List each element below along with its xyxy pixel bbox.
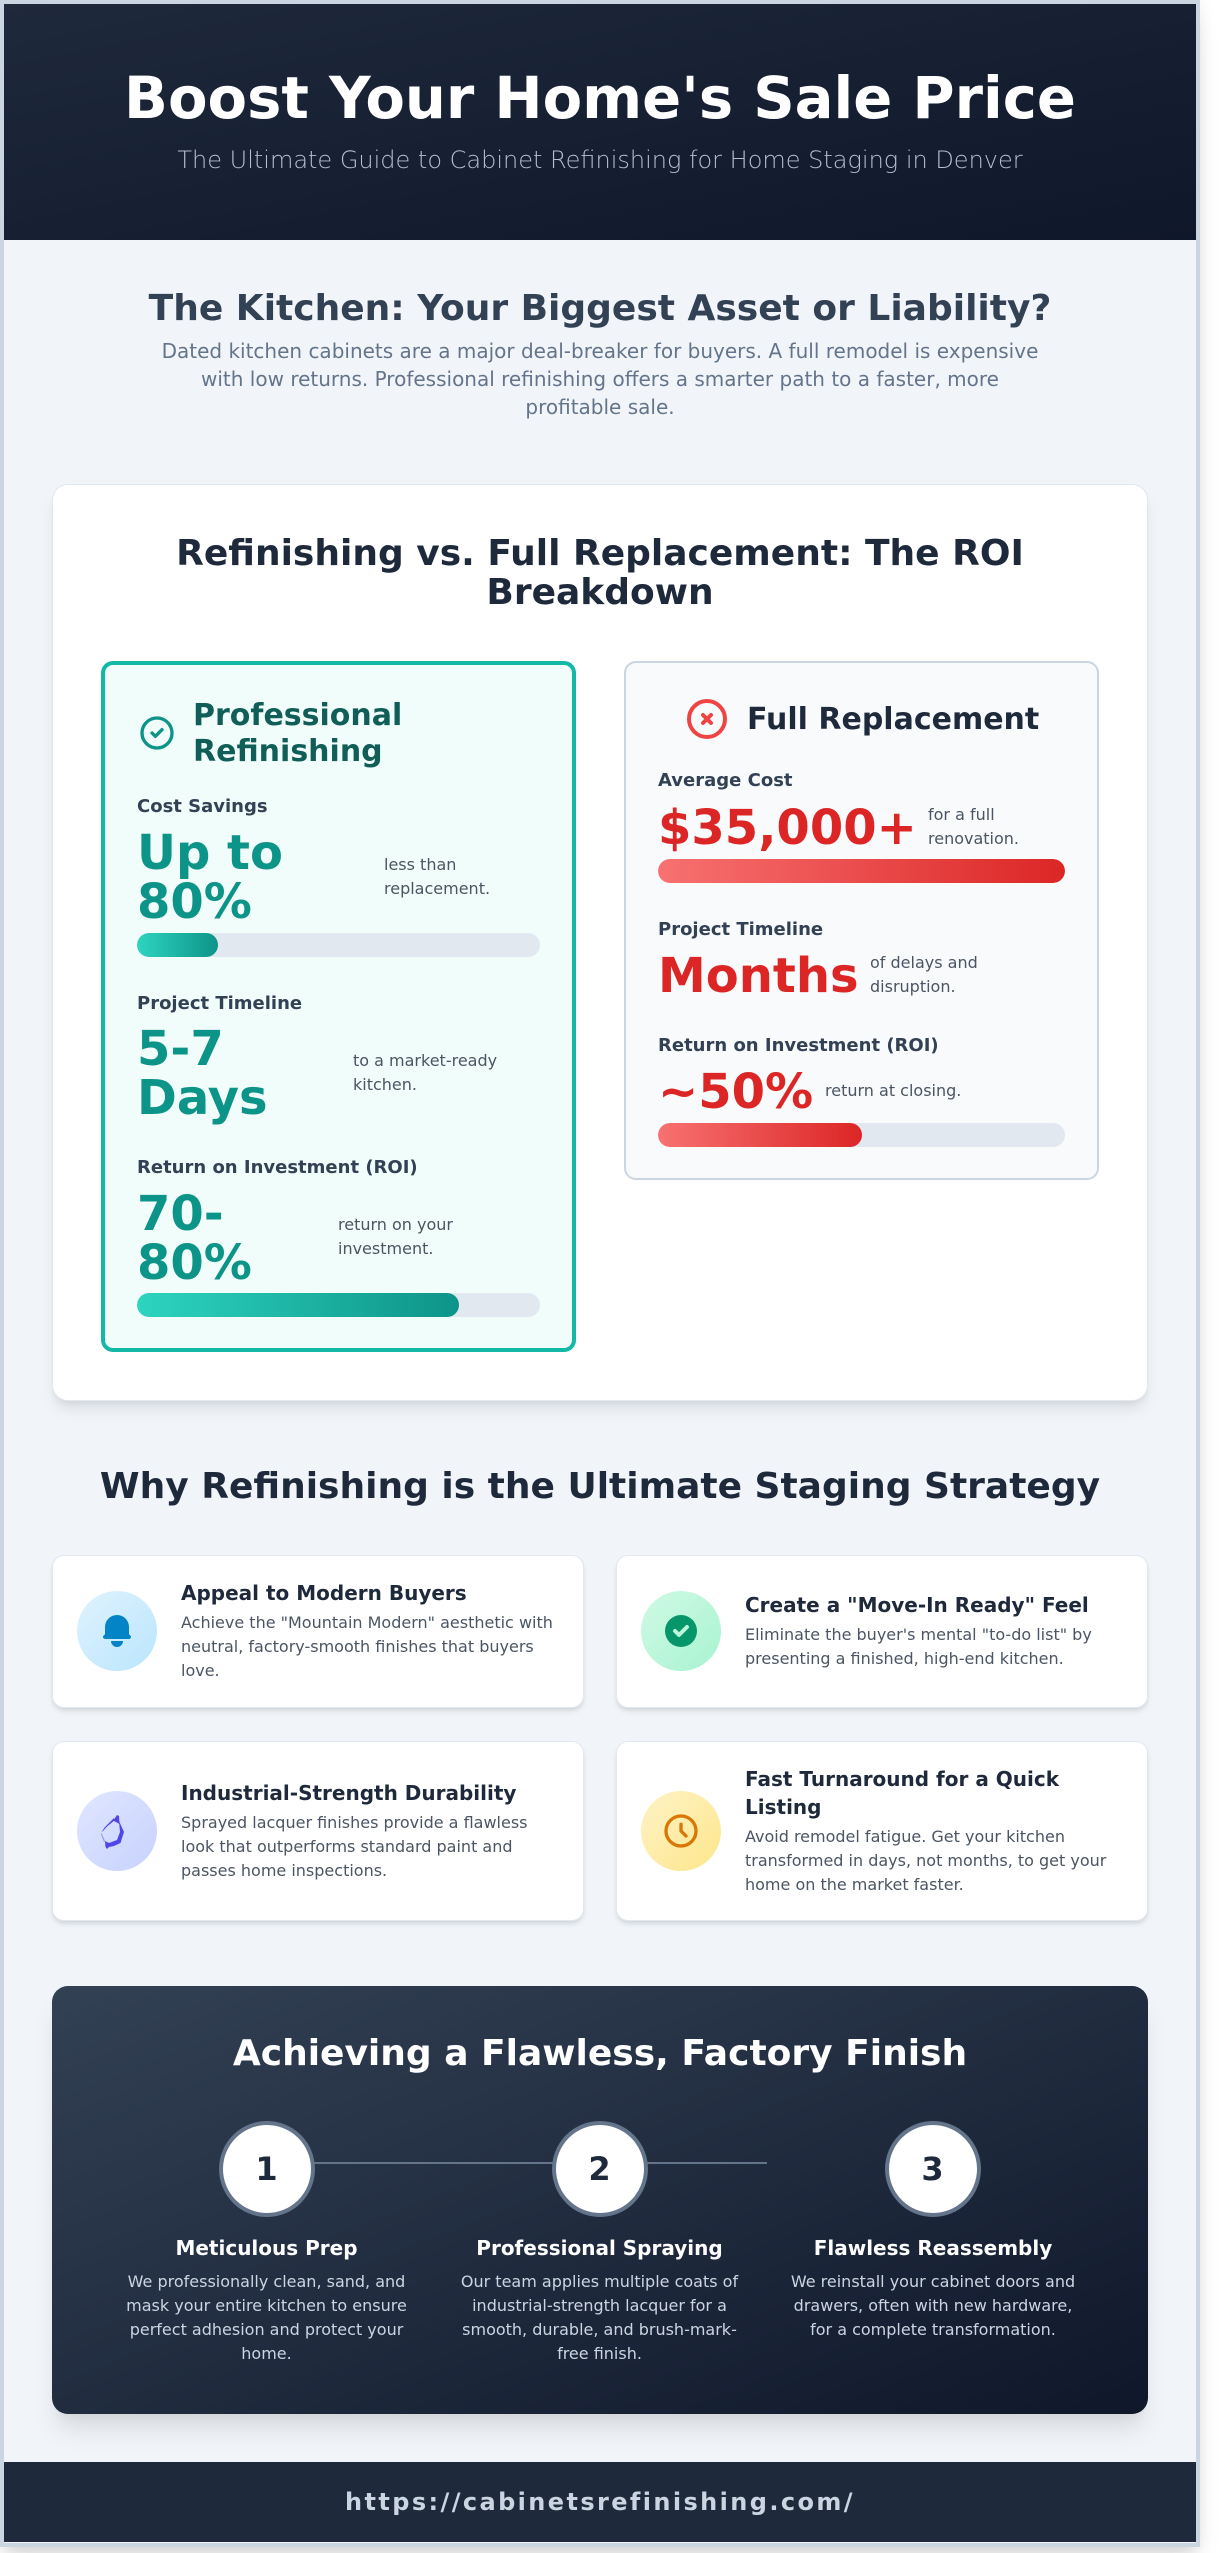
comparison heading — [176, 532, 1024, 613]
process heading: Achieving a Flawless, Factory Finish — [233, 2033, 967, 2074]
label: Average Cost — [658, 770, 793, 790]
metric: cost savings — [137, 796, 540, 957]
description — [870, 953, 978, 996]
step text — [461, 2272, 738, 2363]
panel heading — [193, 698, 402, 769]
step 1 — [126, 2121, 407, 2363]
value: $35,000+ — [658, 800, 917, 856]
description: to a market-ready — [353, 1051, 497, 1070]
description: return at closing. — [825, 1081, 961, 1100]
metric: project timeline — [658, 919, 978, 1004]
card text: look that outperforms standard paint and — [181, 1837, 513, 1856]
value: 80% — [137, 874, 252, 930]
description: investment. — [338, 1239, 433, 1258]
step text: mask your entire kitchen to ensure — [126, 2296, 407, 2315]
label: Project Timeline — [137, 993, 302, 1014]
intro paragraph: with low returns. Professional refinishing offers a smarter path to a faster, more — [201, 366, 999, 390]
icon: shield fragment — [77, 1791, 157, 1871]
card title: Listing — [745, 1795, 821, 1819]
card title: Industrial-Strength Durability — [181, 1781, 516, 1805]
metric: project timeline — [137, 993, 497, 1126]
description: replacement. — [384, 879, 490, 898]
header banner — [4, 4, 1196, 240]
description — [384, 855, 490, 898]
comparison heading: Refinishing vs. Full Replacement: The ROI — [176, 532, 1024, 574]
step number: 3 — [921, 2150, 944, 2188]
description: return on your — [338, 1215, 453, 1234]
step text: We professionally clean, sand, and — [128, 2272, 405, 2291]
card text: Eliminate the buyer's mental "to-do list" by — [745, 1625, 1092, 1644]
description: kitchen. — [353, 1075, 417, 1094]
card text — [745, 1625, 1092, 1668]
label: Return on Investment (ROI) — [137, 1157, 418, 1178]
card text: transformed in days, not months, to get your — [745, 1851, 1106, 1870]
card text: home on the market faster. — [745, 1875, 964, 1894]
metric: average cost — [658, 770, 1065, 883]
card text: passes home inspections. — [181, 1861, 387, 1880]
value — [137, 1021, 268, 1126]
strategy heading: Why Refinishing is the Ultimate Staging Strategy — [100, 1466, 1100, 1506]
card text: Avoid remodel fatigue. Get your kitchen — [745, 1827, 1065, 1846]
step text — [126, 2272, 407, 2363]
value — [137, 1186, 252, 1291]
step number — [218, 2121, 314, 2217]
card title: Fast Turnaround for a Quick — [745, 1767, 1059, 1791]
step title: Meticulous Prep — [175, 2236, 358, 2260]
progress bar 20% — [137, 933, 540, 957]
step number: 1 — [255, 2150, 278, 2188]
intro paragraph: Dated kitchen cabinets are a major deal-breaker for buyers. A full remodel is expensive — [162, 338, 1038, 362]
card text: love. — [181, 1661, 220, 1680]
panel: process steps — [52, 1986, 1148, 2414]
progress bar 80% — [137, 1293, 540, 1317]
step text: perfect adhesion and protect your — [130, 2320, 403, 2339]
card text: Sprayed lacquer finishes provide a flawless — [181, 1813, 528, 1832]
connector line — [266, 2162, 767, 2164]
step number — [884, 2121, 980, 2217]
description: renovation. — [928, 828, 1019, 848]
value: ~50% — [658, 1064, 813, 1120]
description — [928, 804, 1019, 848]
step text: Our team applies multiple coats of — [461, 2272, 738, 2291]
step 3 — [791, 2121, 1075, 2339]
comparison heading: Breakdown — [486, 572, 714, 613]
panel: full replacement — [624, 661, 1099, 1180]
value — [137, 825, 283, 930]
title: Boost Your Home's Sale Price — [124, 65, 1076, 132]
card title: Appeal to Modern Buyers — [181, 1581, 467, 1605]
intro paragraph: profitable sale. — [525, 394, 675, 418]
intro heading: The Kitchen: Your Biggest Asset or Liability? — [149, 288, 1051, 328]
panel: ROI comparison card — [52, 484, 1148, 1401]
label: Project Timeline — [658, 919, 823, 940]
icon: x circle outline — [687, 699, 727, 739]
feature card: fast turnaround — [616, 1741, 1148, 1921]
icon: clock — [641, 1791, 721, 1871]
description: disruption. — [870, 977, 956, 996]
subtitle: The Ultimate Guide to Cabinet Refinishing for Home Staging in Denver — [177, 146, 1023, 174]
description: of delays and — [870, 953, 978, 972]
website url: https://cabinetsrefinishing.com/ — [345, 2488, 855, 2516]
label: Return on Investment (ROI) — [658, 1035, 939, 1056]
card text — [745, 1827, 1106, 1894]
step text: home. — [241, 2344, 292, 2363]
panel heading: Professional — [193, 698, 402, 733]
step 2 — [461, 2121, 738, 2363]
feature card: modern buyers — [52, 1555, 584, 1708]
card title — [745, 1767, 1060, 1819]
card text — [181, 1813, 528, 1880]
step text: drawers, often with new hardware, — [794, 2296, 1072, 2315]
feature card: durability — [52, 1741, 584, 1921]
value: Months — [658, 948, 859, 1004]
step text: free finish. — [557, 2344, 642, 2363]
footer — [4, 2462, 1196, 2542]
feature card: move-in ready — [616, 1555, 1148, 1708]
card text: Achieve the "Mountain Modern" aesthetic with — [181, 1613, 553, 1632]
value: Up to — [137, 825, 283, 881]
icon: bell — [77, 1591, 157, 1671]
value: 5-7 — [137, 1021, 224, 1077]
icon: check circle outline — [140, 716, 174, 750]
step title: Professional Spraying — [476, 2236, 723, 2260]
step text: for a complete transformation. — [810, 2320, 1056, 2339]
metric: return on investment — [658, 1035, 1065, 1147]
card text — [181, 1613, 553, 1680]
card text: neutral, factory-smooth finishes that buyers — [181, 1637, 534, 1656]
intro paragraph — [162, 338, 1038, 418]
step number — [552, 2121, 648, 2217]
panel heading: Full Replacement — [747, 702, 1039, 737]
metric: return on investment — [137, 1157, 540, 1317]
step text: industrial-strength lacquer for a — [472, 2296, 727, 2315]
progress bar 50% — [658, 1123, 1065, 1147]
description — [353, 1051, 497, 1094]
value: 80% — [137, 1235, 252, 1291]
value: 70- — [137, 1186, 224, 1242]
progress bar full — [658, 859, 1065, 883]
description — [338, 1215, 453, 1258]
step text: We reinstall your cabinet doors and — [791, 2272, 1075, 2291]
panel heading: Refinishing — [193, 734, 383, 769]
step text: smooth, durable, and brush-mark- — [462, 2320, 737, 2339]
panel: professional refinishing — [101, 661, 576, 1352]
icon: check badge — [641, 1591, 721, 1671]
step number: 2 — [588, 2150, 611, 2188]
label: Cost Savings — [137, 796, 268, 817]
step text — [791, 2272, 1075, 2339]
description: for a full — [928, 804, 995, 824]
card title: Create a "Move-In Ready" Feel — [745, 1593, 1089, 1617]
description: less than — [384, 855, 456, 874]
value: Days — [137, 1070, 268, 1126]
card text: presenting a finished, high-end kitchen. — [745, 1649, 1064, 1668]
step title: Flawless Reassembly — [814, 2236, 1052, 2260]
